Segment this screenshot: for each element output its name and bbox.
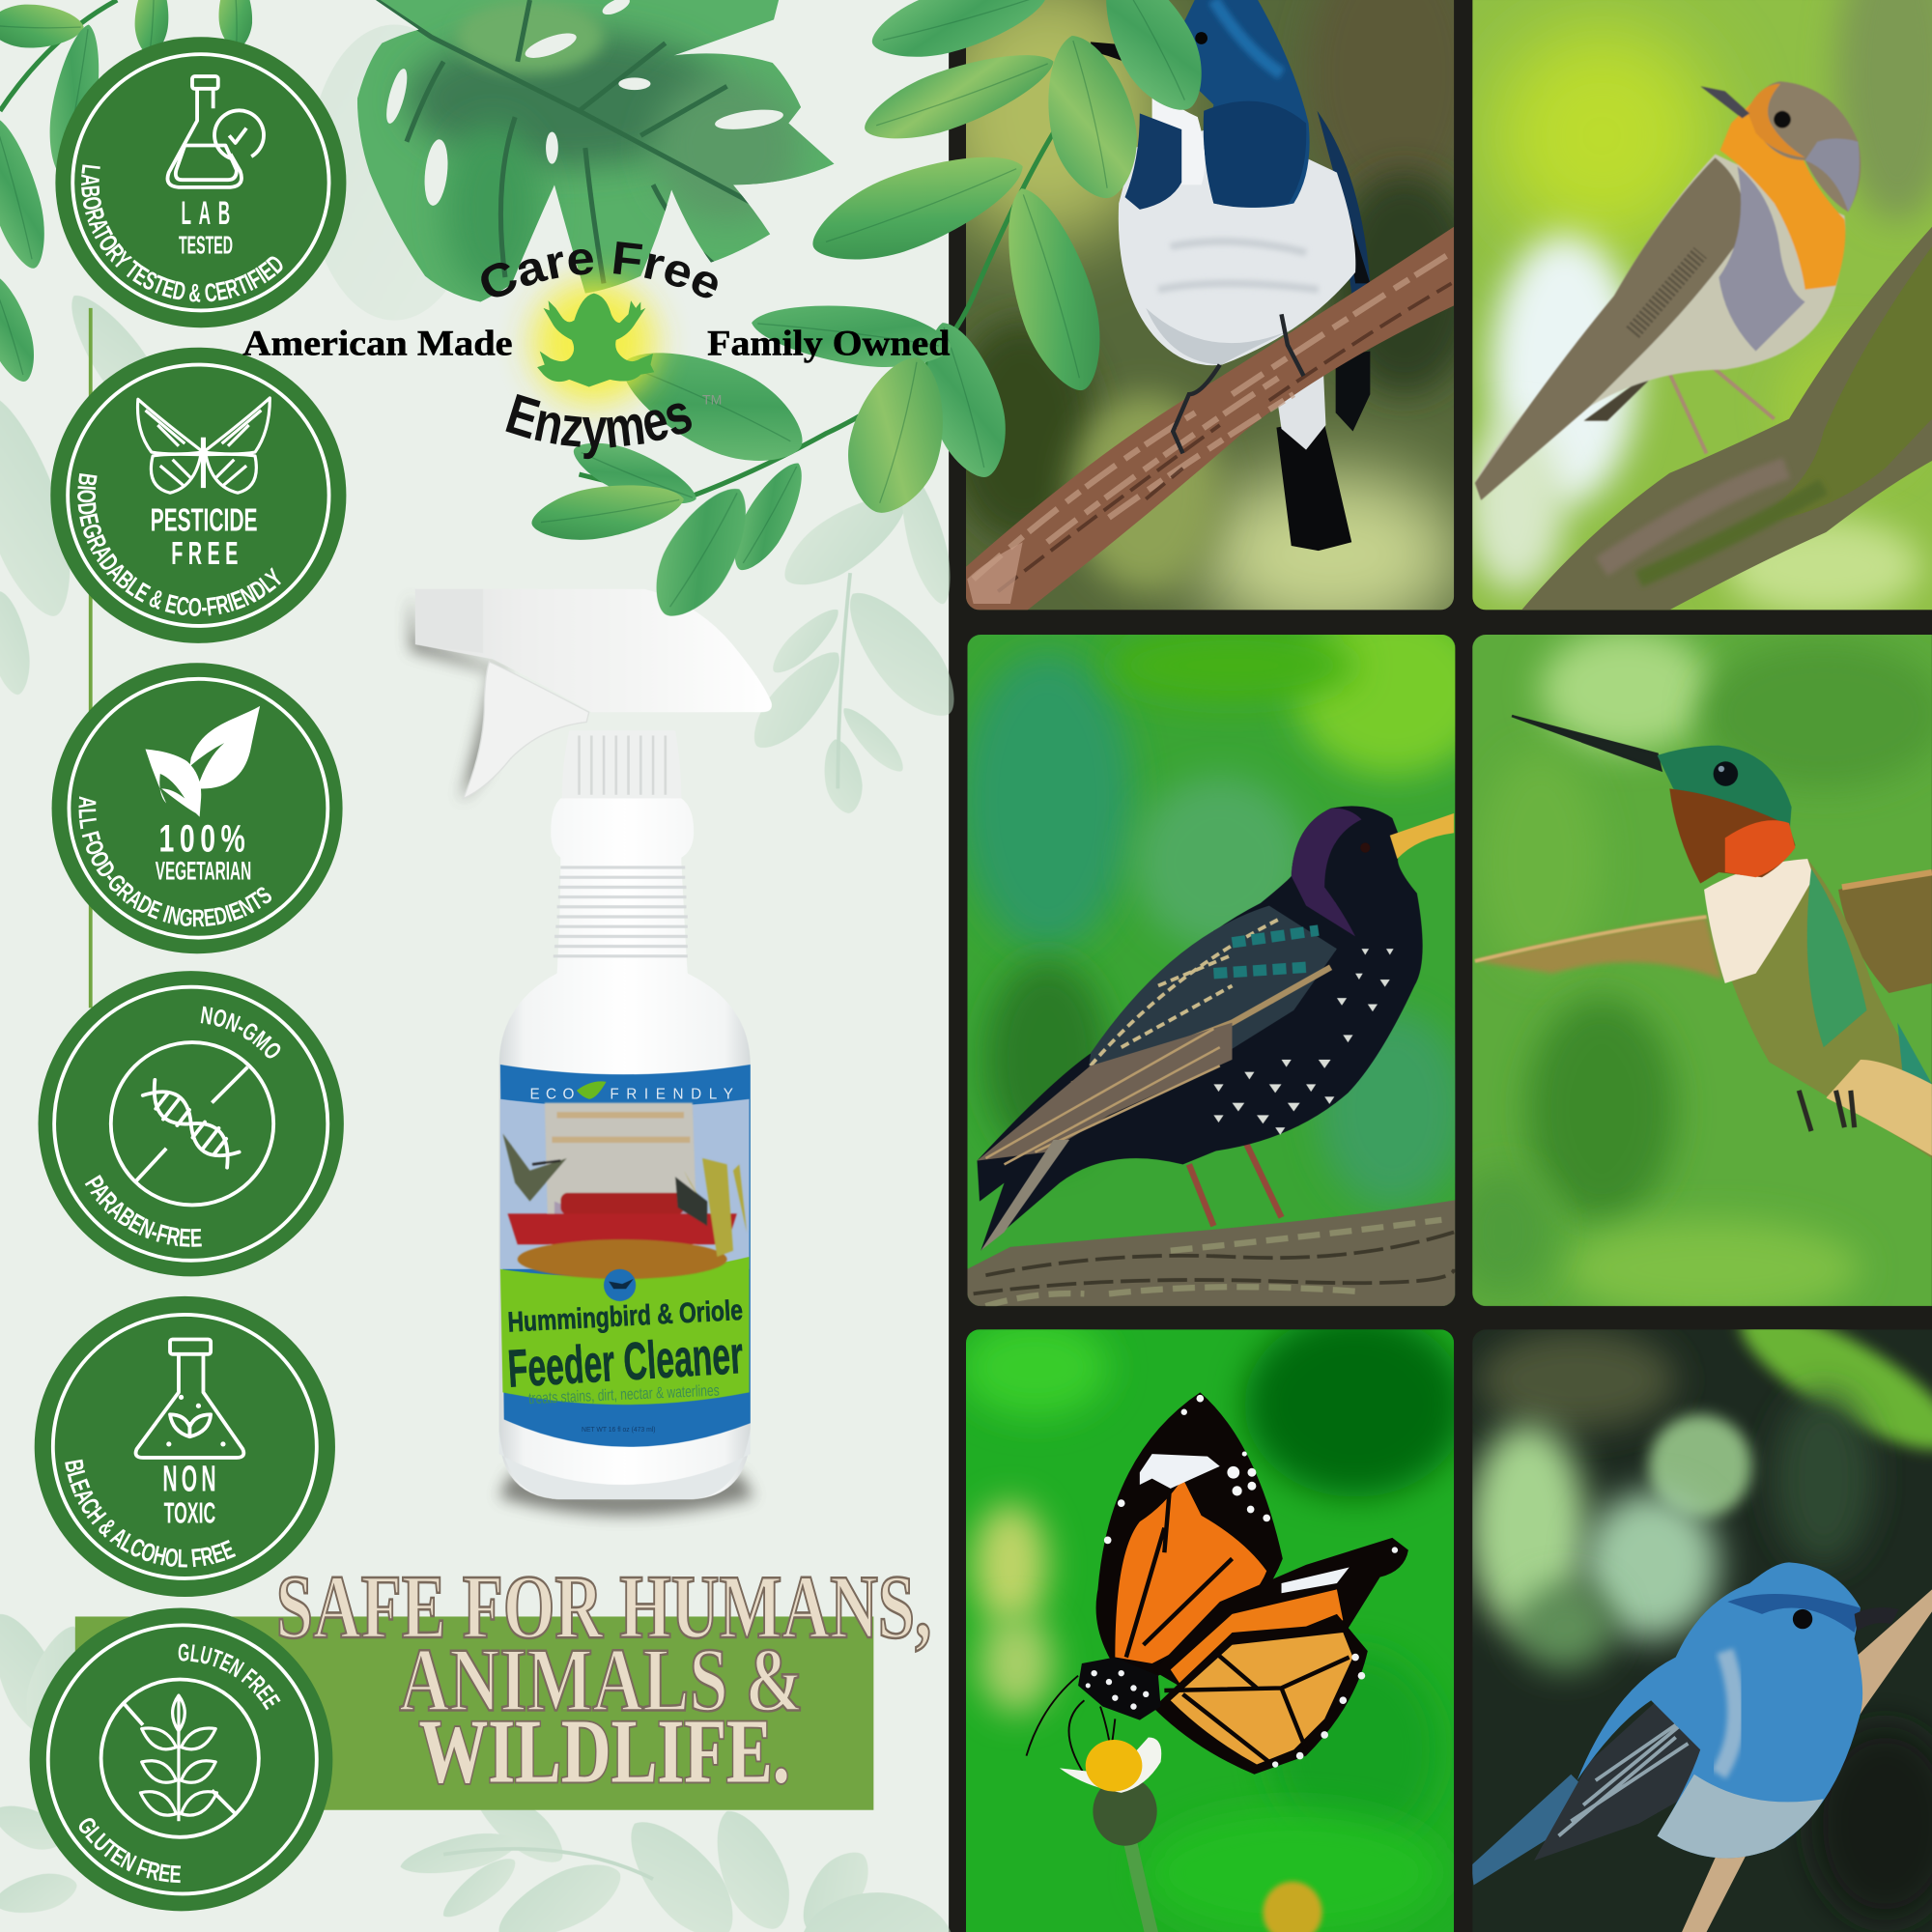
badge: lab tested: LABORATORY TESTED & CERTIFIED [81,164,282,302]
badge: lab tested [55,37,346,328]
icon: flask with check [167,76,264,187]
icon: flask with sprout [136,1339,243,1458]
badge: gluten free [30,1608,332,1911]
bottle body [499,799,751,1499]
product label: treats stains, dirt, nectar & waterlines [528,1381,720,1407]
icon: wheat [140,1695,216,1821]
photo panel: blue flycatcher [966,0,1455,611]
photo panel: starling [968,635,1456,1306]
badge: lab tested: LAB [182,194,238,232]
product label: Hummingbird & Oriole [507,1294,744,1339]
tagline: American Made: American Made [242,323,513,362]
badge: non toxic [35,1296,335,1597]
dark photo grid backing [949,0,1932,1932]
product label: NET WT 16 fl oz (473 ml) [582,1425,656,1434]
starling bird [977,806,1454,1251]
logo: care free enzymes: Care Free [481,242,718,352]
badge: non toxic: BLEACH & ALCOHOL FREE [65,1459,236,1567]
monstera leaf [352,0,844,308]
spray trigger head [415,589,772,799]
logo: care free enzymes: Enzymes [505,394,692,460]
branch [966,227,1454,610]
icon: DNA helix [139,1079,243,1169]
vertical green stem line [89,308,93,1008]
green banner [75,1616,873,1810]
photo panel: blue bird [1468,1287,1932,1932]
label feeder photo [502,1103,747,1279]
moss branch [1521,227,1932,610]
badge: pesticide free: FREE [171,535,243,571]
badge: gluten free: GLUTEN FREE [79,1818,182,1884]
logo: care free enzymes [471,232,729,461]
product label: FRIENDLY [610,1087,733,1103]
foreground leaf over trigger [638,472,768,631]
product label: Feeder Cleaner [506,1324,745,1399]
product bottle [411,589,772,1516]
badge: pesticide free: BIODEGRADABLE & ECO-FRIENDLY [77,473,281,616]
badge: 100% vegetarian: 100% [159,818,250,861]
product label: ECO [529,1087,574,1103]
twig [1682,1589,1932,1932]
badge: gluten free: GLUTEN FREE [178,1644,280,1710]
badge: non-GMO: PARABEN-FREE [85,1175,202,1247]
tagline: Family Owned: Family Owned [707,323,951,362]
badge: lab tested: TESTED [179,233,233,260]
hummingbird [1475,716,1932,1158]
icon: butterfly [138,398,270,493]
butterfly [1026,1392,1408,1817]
headline: safe for humans, animals and wildlife: SAFE FOR HUMANS, [276,1557,931,1658]
headline: safe for humans, animals and wildlife: ANIMALS & [399,1630,804,1730]
flower [1060,1737,1322,1932]
badge: 100% vegetarian [52,663,343,954]
badge: pesticide free [50,348,346,643]
badge: non toxic: NON [162,1458,220,1499]
flycatcher bird [1091,0,1370,551]
bottle shadow [411,594,754,1516]
pale background foliage [0,25,973,1932]
headline: safe for humans, animals and wildlife: WILDLIFE. [419,1701,790,1802]
photo panel: robin [1466,0,1932,616]
headline: safe for humans, animals and wildlife [276,1557,931,1802]
badge: pesticide free: PESTICIDE [151,503,258,539]
photo panel: butterfly [961,1312,1466,1932]
photo panel: hummingbird [1454,629,1932,1319]
product label [500,1065,751,1447]
badge: non-GMO: NON-GMO [201,1007,280,1059]
foreground leaves and branch [0,0,1222,580]
icon: frog [537,294,654,387]
badge: 100% vegetarian: VEGETARIAN [156,857,251,886]
badge: non-GMO [39,971,344,1277]
robin bird [1475,81,1861,500]
log [967,1200,1455,1306]
badge: non toxic: TOXIC [164,1497,215,1530]
badge: 100% vegetarian: ALL FOOD-GRADE INGREDIENTS [79,796,271,927]
icon: leaves [146,706,260,817]
logo: care free enzymes: TM [702,391,722,407]
cap [562,730,681,799]
blue bird [1471,1562,1899,1886]
